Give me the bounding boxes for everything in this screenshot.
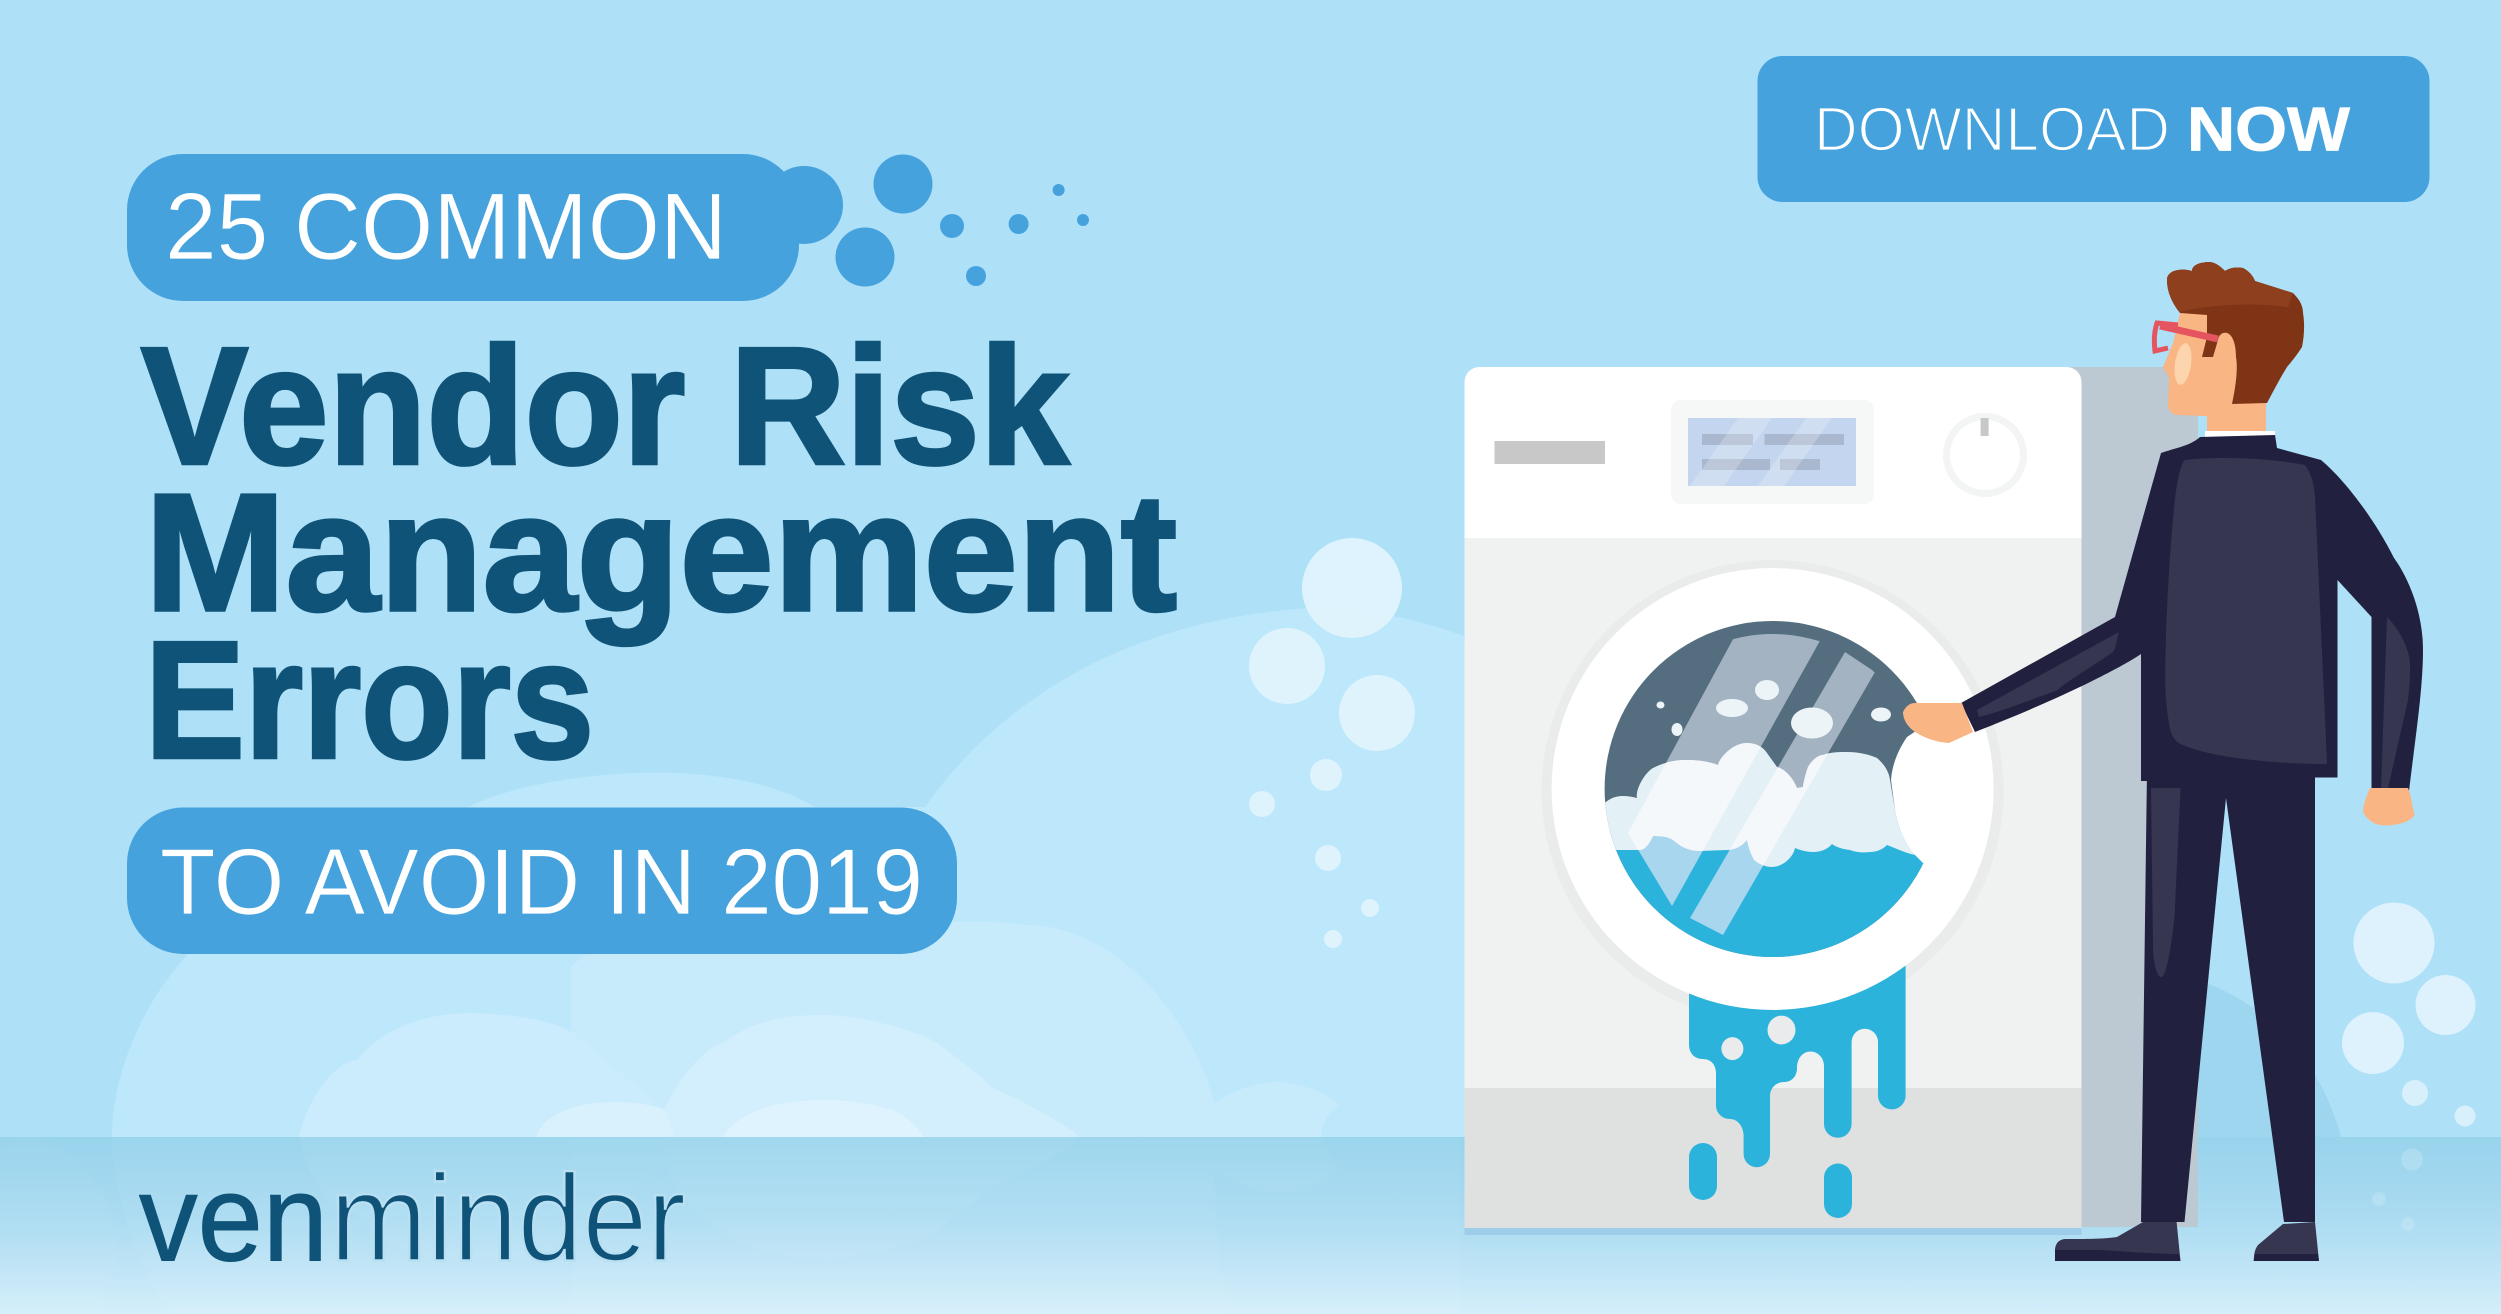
door rim (1552, 568, 1994, 1010)
foam spots on drips (1721, 1016, 1796, 1060)
right shoe sole (2254, 1254, 2319, 1261)
main title: Vendor Risk (141, 314, 1070, 500)
water leak drips (1689, 960, 1906, 1218)
jacket front panel (2165, 458, 2327, 764)
dial knob (1943, 413, 2027, 497)
shirt collar (2205, 431, 2275, 437)
download button: NOW (2187, 96, 2351, 165)
display screen (1671, 400, 1874, 504)
glasses (2154, 323, 2218, 351)
door outer ring (1542, 560, 2004, 1022)
right shoe (2254, 1222, 2319, 1261)
suds bubbles (1656, 680, 1891, 738)
trousers (2141, 770, 2315, 1222)
background clouds (112, 608, 2341, 1137)
control label (1494, 441, 1605, 464)
machine front (1464, 538, 2082, 1088)
download button: DOWNLOAD (1814, 96, 2170, 165)
machine side panel (2060, 367, 2198, 1227)
soap bubbles right of person (2342, 902, 2476, 1231)
drum paddles under water (1638, 836, 1764, 935)
foam (1600, 743, 1915, 867)
main title (141, 314, 1177, 794)
other arm highlight (2381, 617, 2410, 788)
bubbles beside top pill (836, 154, 1089, 286)
door glass (1604, 621, 1924, 957)
left shoe (2055, 1222, 2180, 1261)
head (2163, 310, 2240, 417)
subheading pill: to avoid in 2019: TO AVOID IN 2019 (160, 829, 923, 934)
floor with cloud reflection (0, 1137, 2501, 1314)
heading pill: 25 common: 25 COMMON (165, 174, 727, 280)
main title: Errors (145, 608, 594, 794)
venminder logo: minder (330, 1151, 686, 1288)
door handle cutout (1891, 725, 1965, 863)
hair highlight (2167, 262, 2293, 312)
floor shadow (1464, 1228, 2082, 1235)
download button (1758, 56, 2430, 202)
soap bubbles left of washer (1249, 538, 1415, 948)
trouser crease highlight (2151, 788, 2180, 977)
neck (2207, 400, 2266, 440)
main title: Management (145, 460, 1177, 646)
arm highlight (1977, 632, 2119, 717)
venminder logo: ven (139, 1151, 328, 1288)
machine top panel (1464, 367, 2082, 538)
hair (2167, 262, 2304, 404)
cheek highlight (2172, 342, 2194, 386)
rear hand (2363, 788, 2415, 826)
person (1903, 262, 2423, 1261)
water (1610, 830, 1924, 957)
jacket and arms (1961, 435, 2423, 791)
left shoe sole (2055, 1250, 2180, 1261)
subheading pill: to avoid in 2019 (127, 808, 957, 954)
heading pill: 25 common (127, 154, 843, 301)
drum paddles over foam (1628, 743, 1828, 866)
machine base (1464, 1088, 2082, 1228)
front hand (1903, 703, 1973, 743)
washing machine (1464, 367, 2198, 1235)
venminder logo (139, 1151, 686, 1288)
drum paddles on dark (1666, 634, 1875, 788)
